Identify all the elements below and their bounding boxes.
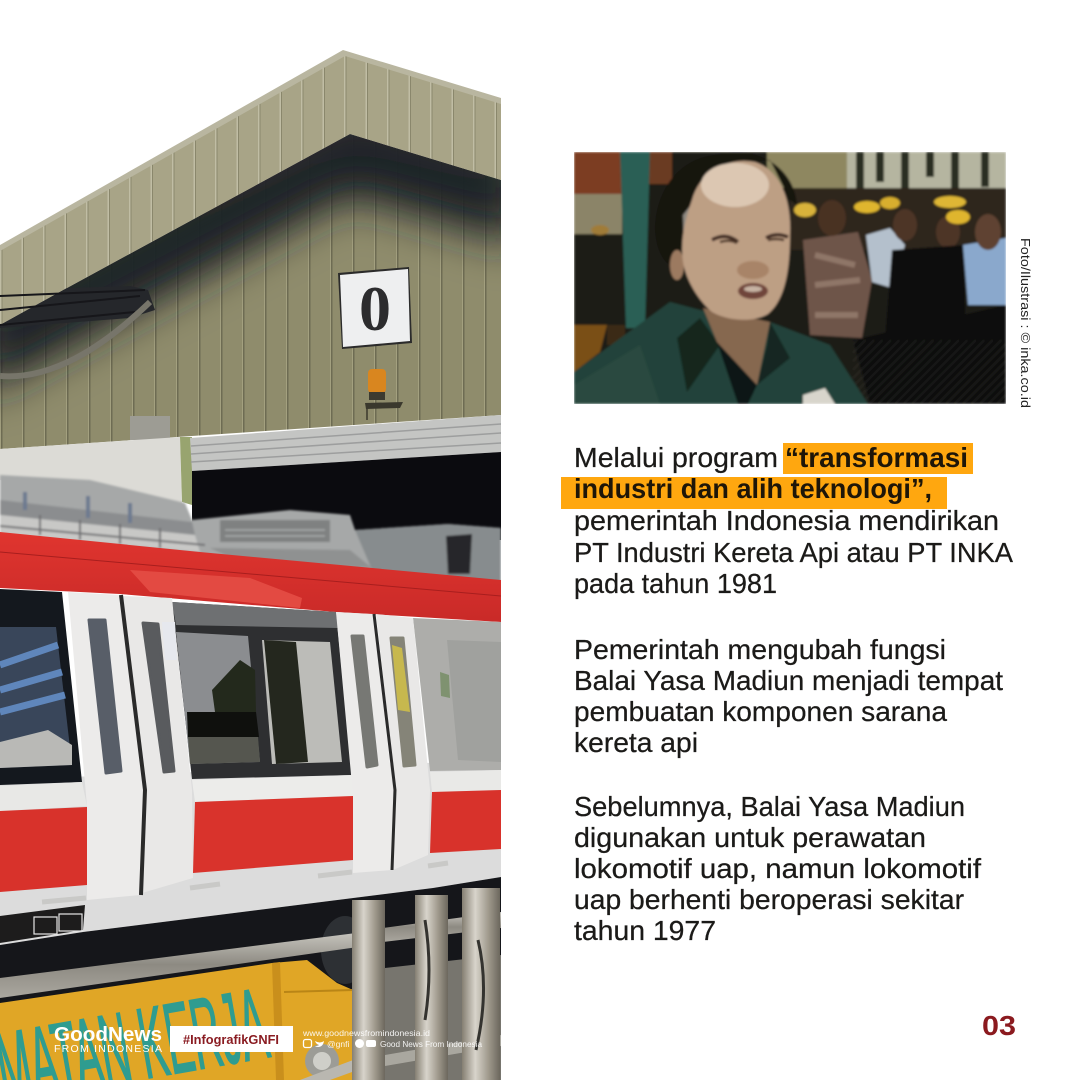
paragraph 2: pembuatan komponen sarana [574, 696, 948, 727]
steel posts [352, 888, 500, 1080]
red side panels [0, 807, 87, 892]
orange warning lamp [365, 369, 403, 420]
footer logo: FROM INDONESIA [54, 1043, 162, 1055]
ear [670, 250, 684, 280]
white band details [0, 782, 87, 811]
footer website and social handles: www.goodnewsfromindonesia.id [302, 1028, 430, 1038]
paragraph 3: digunakan untuk perawatan [574, 822, 926, 853]
paragraph 2 [574, 634, 1003, 758]
footer website and social handles: Good News From Indonesia [380, 1039, 482, 1049]
jacket [574, 302, 868, 404]
hangar wall [0, 134, 501, 449]
hair [655, 152, 797, 268]
neck [703, 308, 770, 385]
paragraph 2: Pemerintah mengubah fungsi [574, 634, 946, 665]
rooftop equipment [0, 475, 501, 585]
paragraph 1 with highlight [561, 442, 1014, 599]
photo background [574, 152, 1006, 404]
workers crowd [790, 188, 1006, 250]
paragraph 3: Sebelumnya, Balai Yasa Madiun [574, 791, 965, 822]
footer website and social handles: @gnfi [327, 1039, 349, 1049]
photo: LRT train in front of depot [0, 50, 520, 1080]
yellow crate with lettering [0, 960, 358, 1080]
middle window [172, 602, 352, 779]
paragraph 1 with highlight: PT Industri Kereta Api atau PT INKA [574, 537, 1014, 568]
paragraph 2: Balai Yasa Madiun menjadi tempat [574, 665, 1003, 696]
paragraph 1 with highlight: pada tahun 1981 [574, 568, 777, 599]
train roof red band [0, 532, 501, 622]
head and face [682, 161, 790, 320]
door sills [42, 863, 448, 902]
left doors [68, 592, 143, 900]
orange highlight [561, 443, 973, 509]
hangar roof fascia [0, 50, 501, 325]
paragraph 3: lokomotif uap, namun lokomotif [574, 853, 981, 884]
white wall [0, 437, 182, 505]
portrait photo: man speaking in front of workers [574, 152, 1006, 404]
hashtag badge [170, 1026, 293, 1052]
green steel column [620, 152, 650, 328]
hashtag badge: #InfografikGNFI [183, 1033, 279, 1047]
paragraph 3 [574, 791, 981, 946]
left window [0, 589, 82, 785]
dark capacity panel [0, 905, 85, 943]
right doors [336, 612, 393, 873]
roller shutter [190, 415, 501, 471]
paragraph 2: kereta api [574, 727, 698, 758]
sign with zero [338, 267, 412, 349]
vertical photo credit: Foto/Ilustrasi : © inka.co.id [1018, 238, 1032, 408]
right window [413, 618, 501, 771]
paragraph 1 with highlight: pemerintah Indonesia mendirikan [574, 505, 999, 536]
green column [180, 437, 192, 505]
paragraph 1 with highlight: “transformasi [785, 442, 968, 473]
undercarriage [0, 877, 501, 1080]
concrete block [130, 416, 170, 440]
dark doorway [192, 452, 501, 540]
paragraph 1 with highlight: Melalui program [574, 442, 778, 473]
cables and rope [0, 286, 155, 376]
steel handrail [0, 912, 501, 1080]
footer logo [54, 1024, 162, 1055]
train body [0, 532, 501, 945]
paragraph 1 with highlight: industri dan alih teknologi”, [574, 473, 932, 504]
page number: 03 [982, 1010, 1016, 1041]
sign with zero: 0 [359, 273, 391, 344]
footer logo: GoodNews [54, 1024, 162, 1046]
paragraph 3: uap berhenti beroperasi sekitar [574, 884, 964, 915]
paragraph 3: tahun 1977 [574, 915, 716, 946]
footer website and social handles [302, 1028, 482, 1049]
